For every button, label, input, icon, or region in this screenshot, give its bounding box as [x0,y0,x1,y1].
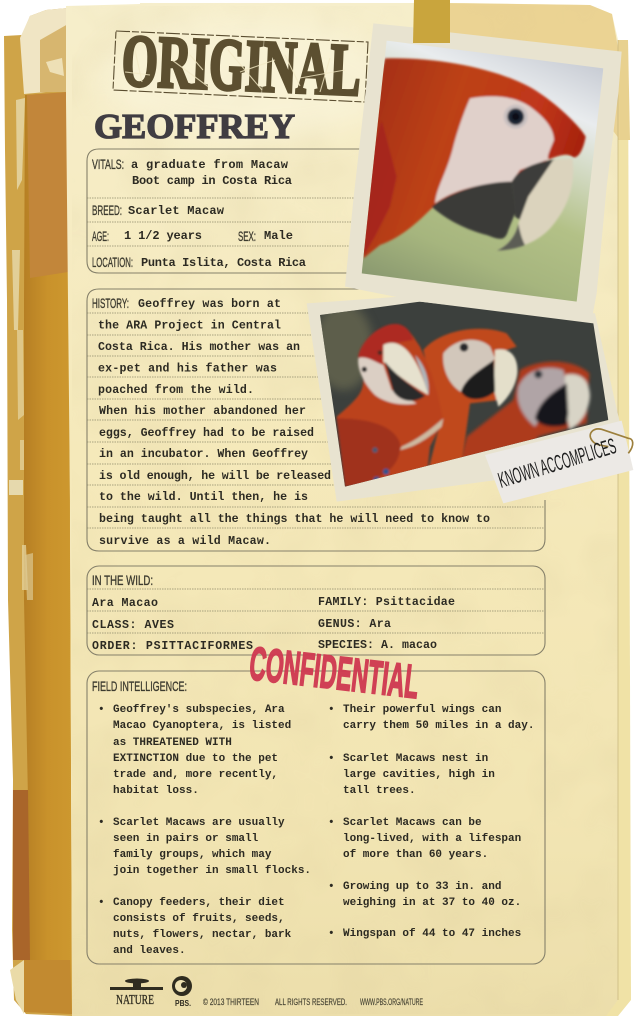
upper beak [517,156,575,246]
vitals row: a graduate from Macaw [131,158,289,172]
left binding strip [4,8,72,1016]
history text: Geoffrey was born at [138,298,281,311]
panel: field intelligence [87,671,545,964]
history text: poached from the wild. [98,384,254,397]
lower mandible [432,182,515,239]
right column bullets: tall trees. [343,785,416,797]
left column bullets: family groups, which may [113,849,272,861]
macaw head feathers [360,58,586,258]
age and sex row: SEX: [238,228,256,244]
photo: known accomplices [307,295,628,502]
taxonomy: GENUS: Ara [318,618,391,631]
history text: survive as a wild Macaw. [99,535,271,548]
left column bullets: habitat loss. [113,785,199,797]
tape [413,0,450,43]
original stamp: ORIGINAL [120,20,363,112]
original stamp [113,20,368,112]
known accomplices label card [485,421,633,503]
right column bullets: Scarlet Macaws can be [343,817,482,829]
left column bullets: • [98,897,105,909]
panel: in the wild [87,566,545,655]
taxonomy: FAMILY: Psittacidae [318,596,455,609]
field intelligence label: FIELD INTELLIGENCE: [92,678,187,694]
location row: LOCATION: [92,254,133,270]
eye [504,105,528,129]
left column bullets: Macao Cyanoptera, is listed [113,720,291,732]
vitals row: Boot camp in Costa Rica [132,174,292,188]
right column bullets: • [328,704,335,716]
history text: the ARA Project in Central [98,320,281,332]
breed row: Scarlet Macaw [128,204,225,218]
history text: is old enough, he will be released [99,470,331,483]
copyright line: WWW.PBS.ORG/NATURE [360,997,423,1008]
location row: Punta Islita, Costa Rica [141,256,306,270]
vitals row: VITALS: [92,156,124,172]
right column bullets: large cavities, high in [343,769,495,781]
white face patch [435,96,554,203]
right column bullets: long-lived, with a lifespan [343,833,521,845]
left column bullets: join together in small flocks. [113,865,311,877]
taxonomy: ORDER: PSITTACIFORMES [92,640,253,653]
pbs logo: PBS. [175,999,191,1008]
right column bullets: Their powerful wings can [343,704,501,716]
right column bullets: Growing up to 33 in. and [343,881,501,893]
copyright line: © 2013 THIRTEEN [203,997,259,1008]
taxonomy: CLASS: AVES [92,619,174,632]
nature logo: NATURE [116,993,154,1008]
history text: to the wild. Until then, he is [99,491,308,504]
right column bullets: • [328,928,335,940]
text: CONFIDENTIAL [247,636,422,708]
third macaw [460,360,592,458]
right column bullets: of more than 60 years. [343,849,488,861]
right column bullets: • [328,817,335,829]
history text [98,298,490,548]
left column bullets: • [98,817,105,829]
history text: in an incubator. When Geoffrey [99,448,308,461]
age and sex row: AGE: [92,228,109,244]
name heading: GEOFFREY [94,107,295,146]
right column bullets: Wingspan of 44 to 47 inches [343,928,521,940]
location row [92,254,306,270]
left column bullets: nuts, flowers, nectar, bark [113,929,292,941]
pbs logo [172,976,192,1008]
breed row: BREED: [92,202,122,218]
copyright line [203,997,423,1008]
left column bullets: Canopy feeders, their diet [113,897,285,909]
right column bullets: • [328,881,335,893]
history text: Costa Rica. His mother was an [98,341,300,354]
nature logo [110,978,163,1008]
history label: HISTORY: [92,295,129,311]
left column bullets: consists of fruits, seeds, [113,913,285,925]
panel: vitals [87,149,380,273]
history text: being taught all the things that he will need to know to [99,513,490,526]
in the wild label: IN THE WILD: [92,572,153,588]
history text: ex-pet and his father was [98,362,277,376]
copyright line: ALL RIGHTS RESERVED. [275,997,347,1008]
first macaw [337,324,443,487]
vitals row [92,156,292,188]
age and sex row: 1 1/2 years [124,229,202,243]
panel: history [87,289,545,551]
photo: macaw head portrait [345,23,622,320]
breed row [92,202,225,218]
paperclip [590,429,633,453]
age and sex row [92,228,293,244]
left column bullets: trade and, more recently, [113,769,278,781]
left column bullets: • [98,704,105,716]
right column bullets: • [328,753,335,765]
right column bullets: carry them 50 miles in a day. [343,720,534,732]
left column bullets: seen in pairs or small [113,833,259,845]
history text: When his mother abandoned her [99,405,306,418]
left column bullets: Scarlet Macaws are usually [113,817,285,829]
taxonomy: Ara Macao [92,597,158,610]
age and sex row: Male [264,229,293,243]
taxonomy: SPECIES: A. macao [318,639,437,652]
left column bullets [98,704,311,957]
left column bullets: EXTINCTION due to the pet [113,753,278,765]
right column bullets [328,704,534,940]
left column bullets: and leaves. [113,945,186,957]
left column bullets: as THREATENED WITH [113,737,232,749]
right column bullets: Scarlet Macaws nest in [343,753,488,765]
second macaw [423,329,517,477]
history text: eggs, Geoffrey had to be raised [99,427,314,440]
right column bullets: weighing in at 37 to 40 oz. [343,897,521,909]
footer logos [110,976,423,1008]
taxonomy [92,596,455,653]
left column bullets: Geoffrey's subspecies, Ara [113,704,285,716]
